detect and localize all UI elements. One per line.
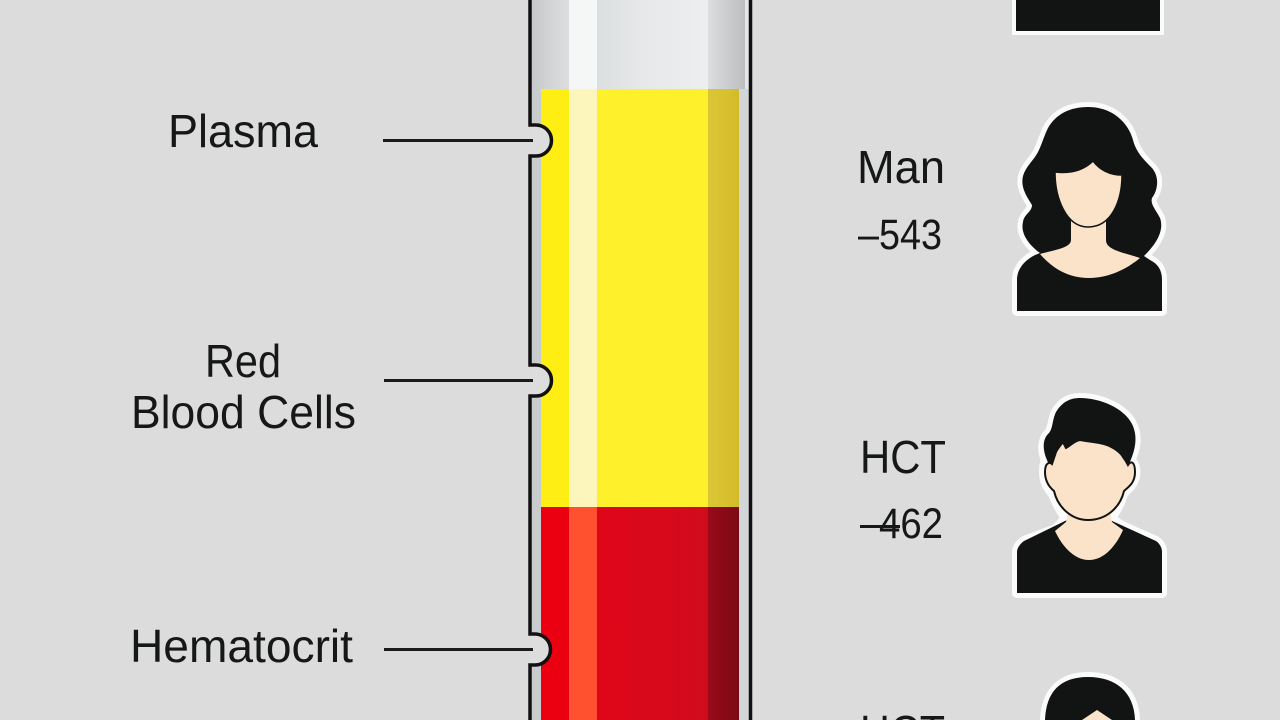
icon: person cropped at bottom xyxy=(1040,672,1140,720)
glass body xyxy=(531,0,749,720)
reading: Man -543: –543 xyxy=(858,211,942,259)
reading: Man -543: Man xyxy=(857,141,945,193)
shirt xyxy=(1017,520,1162,593)
reading: HCT -462: HCT xyxy=(860,431,946,483)
short hair xyxy=(1044,398,1135,466)
neck and chest xyxy=(1040,220,1140,278)
face cropped xyxy=(1082,710,1112,720)
label: Red Blood Cells: Red xyxy=(205,335,281,387)
label: Red Blood Cells: Blood Cells xyxy=(131,386,356,438)
tube walls with notches xyxy=(530,0,551,720)
icon: person cropped at top xyxy=(1012,0,1164,35)
red blood cell layer xyxy=(541,507,739,720)
face xyxy=(1045,440,1135,520)
reading: HCT -462 xyxy=(860,431,946,548)
icon: person with short hair xyxy=(1017,398,1162,593)
hair and shirt xyxy=(1017,107,1162,311)
neck and chest xyxy=(1055,512,1123,560)
right wall xyxy=(749,0,752,720)
icon: person with long wavy hair xyxy=(1017,107,1162,311)
face xyxy=(1055,161,1122,227)
label: Hematocrit: Hematocrit xyxy=(130,620,353,672)
reading: Man -543 xyxy=(857,141,945,259)
test tube xyxy=(530,0,750,720)
reading: HCT -462: 462 xyxy=(879,500,943,548)
label: Plasma: Plasma xyxy=(168,105,318,157)
label: Red Blood Cells xyxy=(131,335,533,438)
plasma layer: yellow xyxy=(541,89,739,507)
hair cropped xyxy=(1045,677,1135,720)
